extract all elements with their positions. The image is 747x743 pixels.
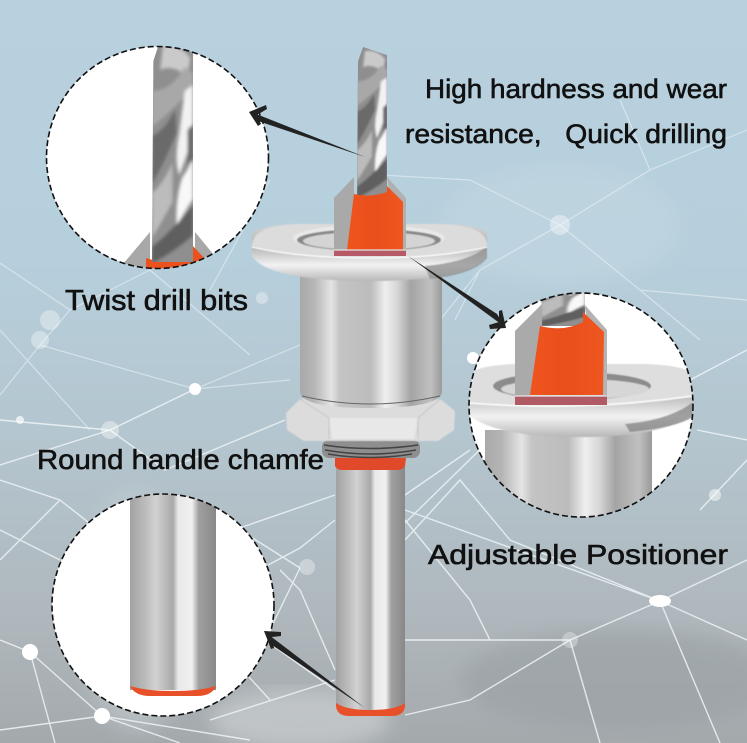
drill bit [357, 47, 387, 197]
label: quick drilling: resistance, Quick drilling [405, 119, 727, 149]
adjustable cone [334, 177, 406, 256]
orange ring [335, 458, 406, 470]
label: round handle: Round handle chamfe [37, 444, 324, 475]
body cylinder [300, 270, 442, 408]
circle: positioner detail [468, 292, 694, 518]
label: adjustable positioner: Adjustable Positioner [428, 539, 728, 570]
product: countersink drill bit [252, 47, 487, 716]
circle: twist drill detail [46, 40, 268, 272]
arrow: flange to circle [408, 256, 506, 329]
flange [252, 224, 487, 281]
thread [322, 440, 420, 458]
arrow: drill bit to circle [249, 105, 365, 157]
hex nut [286, 399, 455, 441]
label: high hardness: High hardness and wear [425, 74, 727, 104]
shank with orange chamfer [336, 466, 405, 716]
circle: round handle chamfer detail [52, 490, 274, 716]
label: twist drill bits: Twist drill bits [65, 285, 248, 317]
arrow: shank to circle [264, 631, 365, 708]
